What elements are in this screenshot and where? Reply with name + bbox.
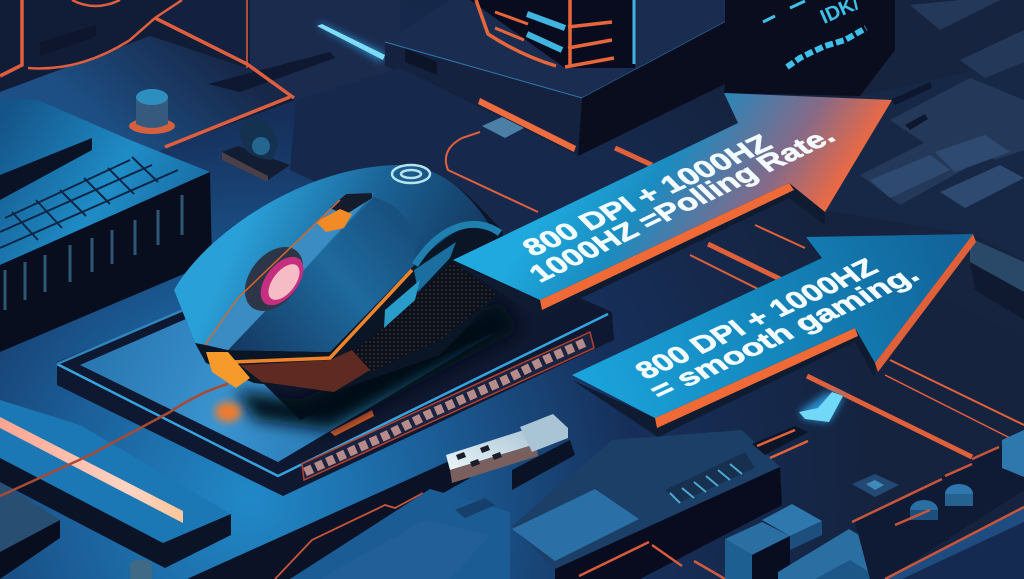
scroll wheel [233, 236, 315, 322]
cyan block stack [725, 504, 882, 579]
thumb buttons [384, 224, 500, 328]
dark slab top-left [0, 138, 92, 200]
black gap under USB [512, 440, 575, 490]
floor glow [215, 402, 241, 422]
right front button [228, 197, 416, 352]
bottom center module [512, 426, 808, 579]
arrow text [516, 122, 842, 287]
glowing bar slab [0, 400, 231, 568]
logo [392, 165, 430, 183]
arrow text: 800 DPI + 1000HZ [516, 129, 778, 261]
arrow text: = smooth gaming. [643, 261, 925, 404]
front light [206, 352, 250, 388]
upper shell [174, 165, 490, 352]
arrow text: 1000HZ =Polling Rate. [522, 122, 842, 287]
lower plate [290, 489, 510, 579]
mouse [174, 165, 503, 392]
mouse cable [0, 384, 228, 496]
lower-left chip [0, 482, 152, 579]
top-left circuit area [0, 0, 400, 172]
bottom-right components [852, 430, 1024, 579]
arrow text: 800 DPI + 1000HZ [629, 253, 884, 384]
center channel [206, 193, 374, 350]
navy surface behind pad [290, 68, 640, 260]
cyan light chip [799, 392, 844, 422]
mouse pad [57, 250, 614, 496]
DPI button [316, 209, 352, 232]
small connector on cable [482, 117, 524, 138]
bottom orange traces [579, 542, 725, 579]
mouse shadow [235, 300, 520, 430]
dark tower and right block [578, 0, 895, 156]
keyboard block [0, 98, 212, 352]
orange light edge [232, 270, 412, 362]
cyan light strip [316, 24, 385, 62]
mouse body [174, 165, 503, 392]
arrow text [629, 253, 925, 404]
USB stick [446, 414, 568, 483]
mesh side grip [352, 262, 497, 372]
central block [385, 0, 725, 156]
right circuit panels [825, 0, 1024, 340]
channel trace [275, 493, 423, 579]
block label glyphs [763, 0, 866, 67]
orange traces [446, 132, 1024, 457]
small connector device [222, 118, 290, 182]
lower black channel [187, 462, 470, 579]
arrow: Polling Rate [453, 93, 892, 318]
knob [129, 89, 175, 134]
rear base [240, 350, 370, 392]
arrow: smooth gaming [572, 234, 976, 437]
